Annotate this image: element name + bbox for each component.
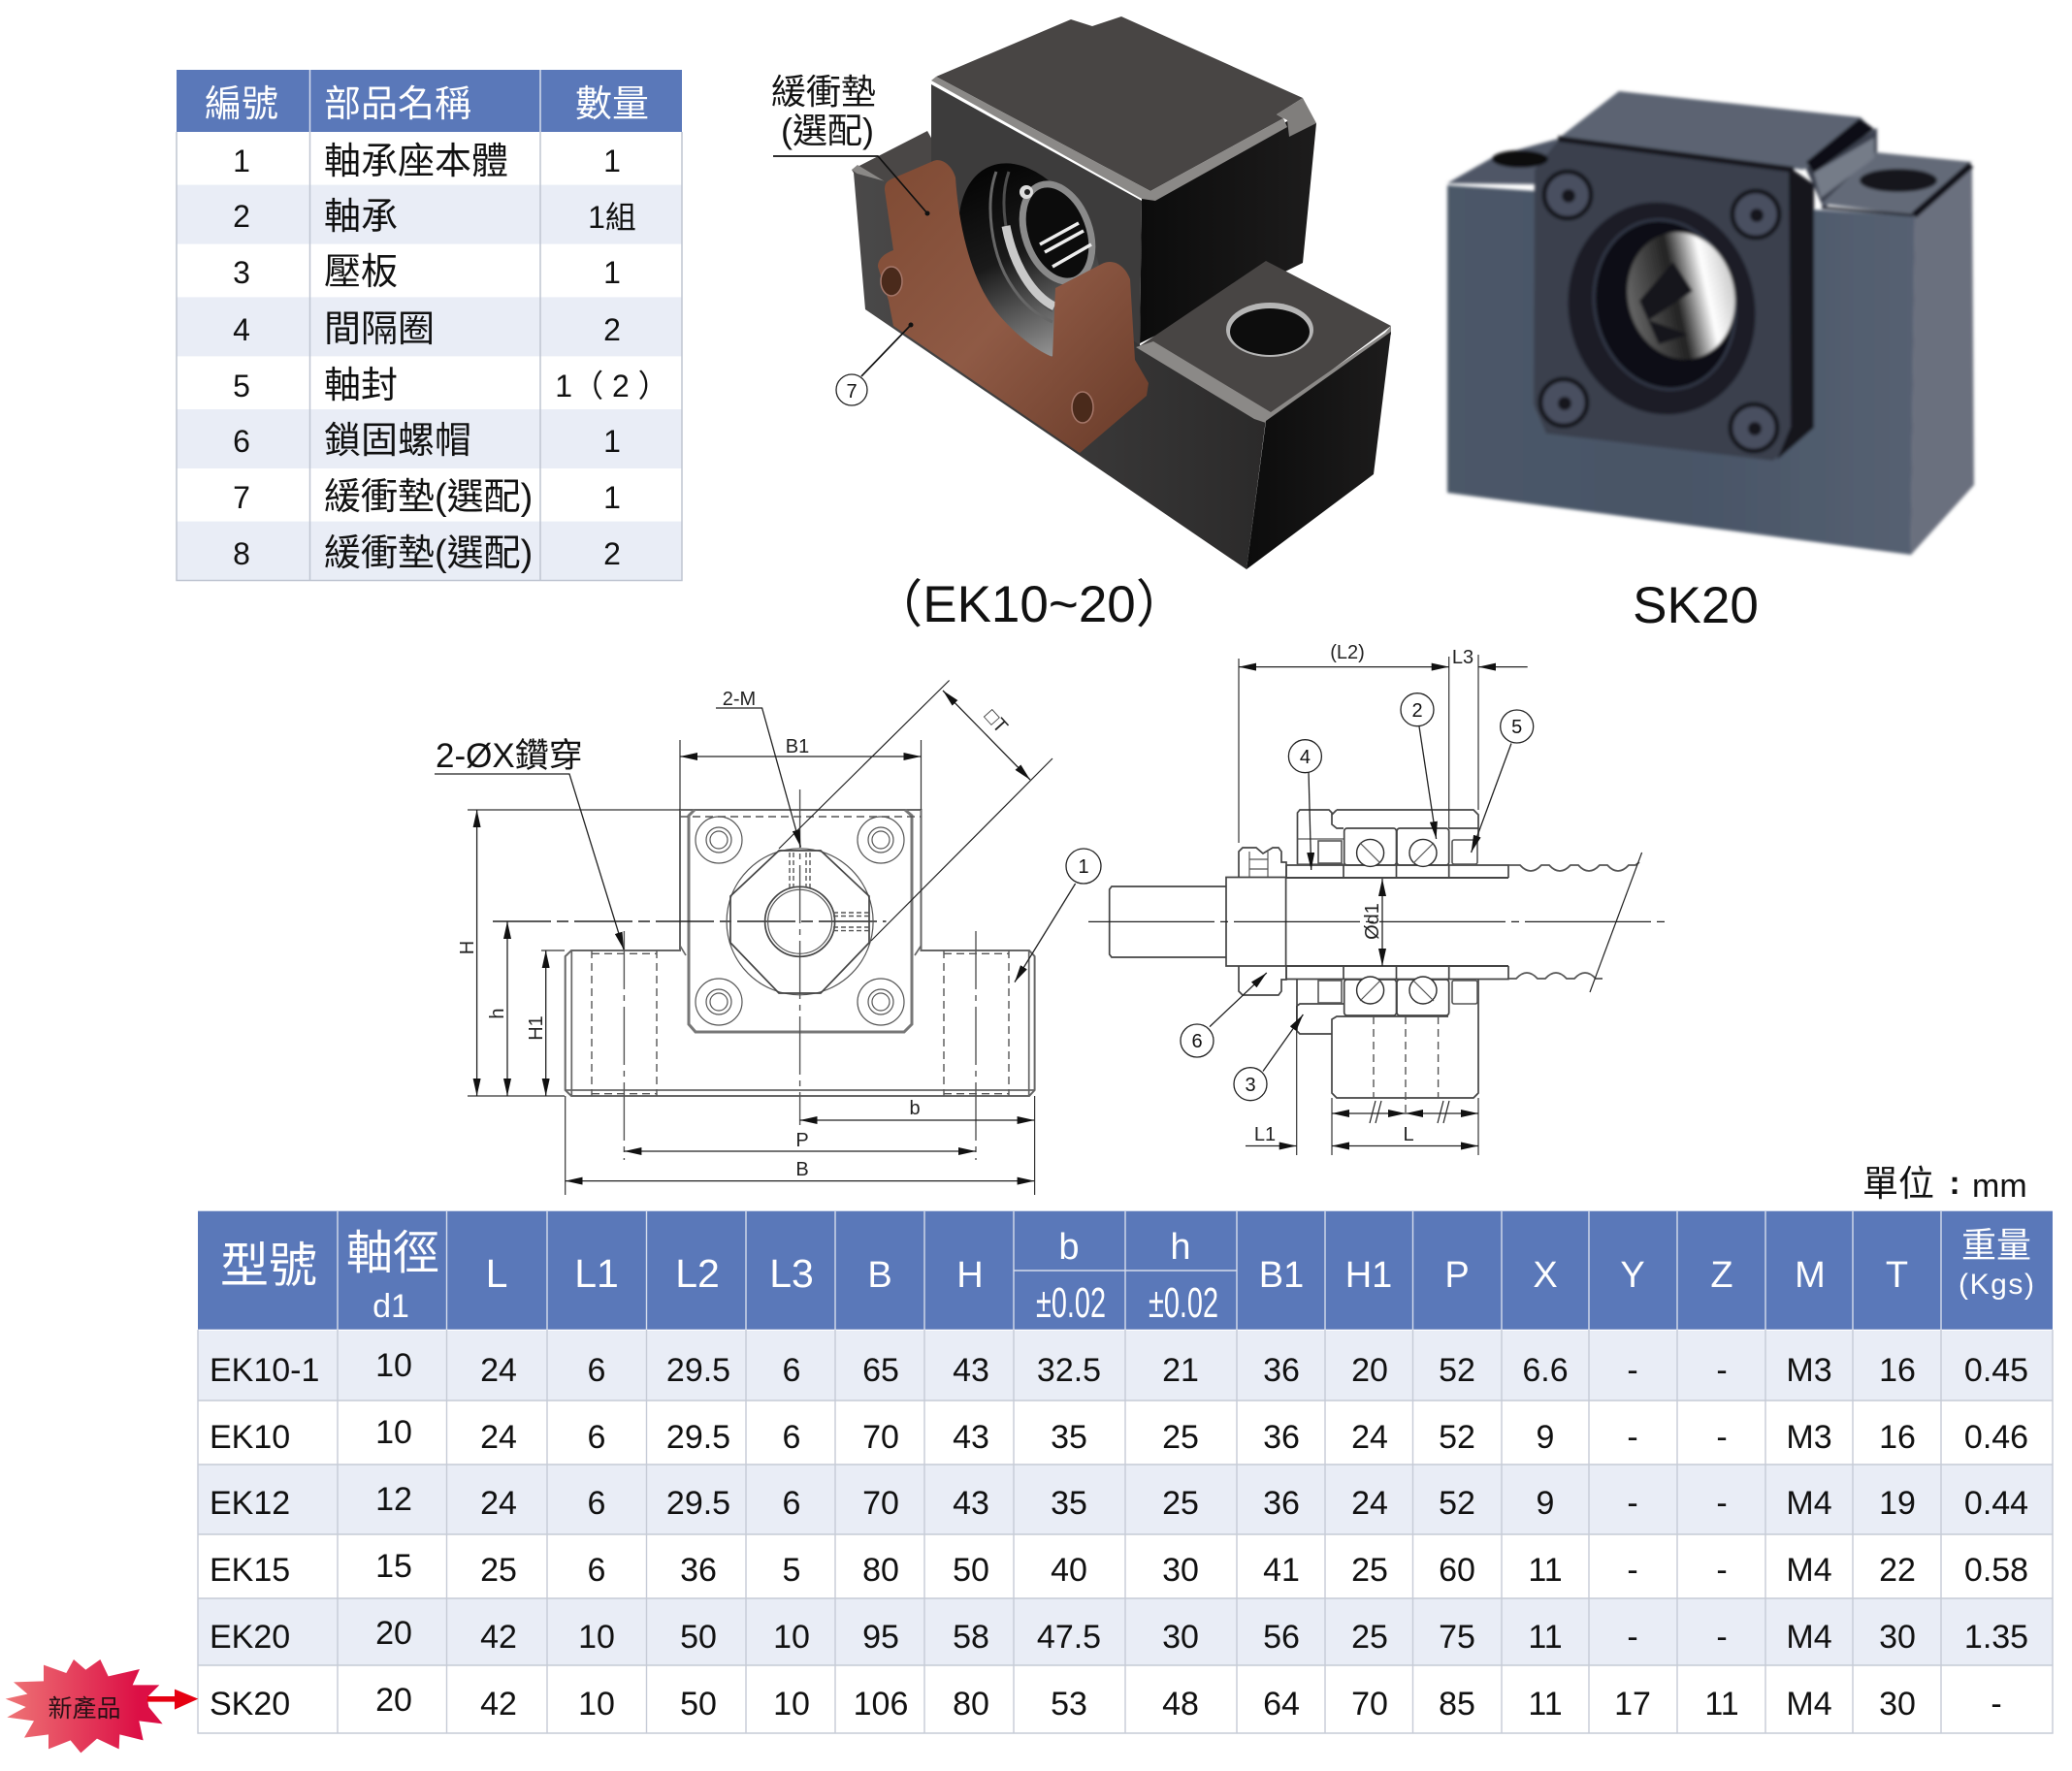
spec row EK20: 95 [862, 1619, 899, 1656]
spec row SK20: 11 [1704, 1686, 1739, 1723]
product photo: SK20 support unit [1447, 91, 1974, 555]
spec row SK20 [210, 1682, 2002, 1723]
spec row EK20: EK20 [210, 1619, 290, 1656]
callout: new product starburst: 新產品 [48, 1695, 121, 1723]
spec row EK15: M4 [1786, 1552, 1832, 1589]
callout: part 4 [1288, 740, 1321, 870]
dimension labels: H [457, 941, 478, 954]
spec row EK12: 24 [480, 1485, 517, 1522]
dimension labels: L3 [1452, 647, 1473, 668]
parts table header: 數量 [575, 84, 649, 125]
spec row EK10-1: 29.5 [666, 1352, 730, 1389]
callout: 2-ØX drilled through: 2-ØX鑽穿 [436, 737, 583, 775]
parts row 6: 1 [603, 424, 621, 459]
spec row EK10-1 [210, 1347, 2028, 1389]
spec row EK10: 43 [953, 1419, 989, 1456]
spec row EK10: 52 [1439, 1419, 1475, 1456]
parts row 3: 1 [603, 255, 621, 290]
parts row 2: 1組 [588, 200, 636, 235]
callout: part 2 [1401, 693, 1437, 839]
spec row EK20: 30 [1879, 1619, 1916, 1656]
locknut octagon and bore [727, 849, 873, 995]
spec row EK12: 36 [1263, 1485, 1300, 1522]
dimension labels: P [795, 1130, 809, 1151]
spec row EK10: 29.5 [666, 1419, 730, 1456]
parts row 6: 鎖固螺帽 [324, 421, 471, 462]
spec row EK12: M4 [1786, 1485, 1832, 1522]
spec row EK10 [210, 1414, 2028, 1456]
spec table header: L1 [574, 1251, 619, 1296]
spec row EK15: 30 [1162, 1552, 1199, 1589]
spec row EK12: 25 [1162, 1485, 1199, 1522]
spec row EK10-1: 43 [953, 1352, 989, 1389]
dimension labels [457, 689, 1012, 1180]
parts row 2: 2 [233, 199, 250, 234]
spec row EK10: 9 [1537, 1419, 1554, 1456]
spec row EK20: M4 [1786, 1619, 1832, 1656]
spec row SK20: 53 [1051, 1686, 1087, 1723]
spec row EK20 [210, 1615, 2028, 1656]
spec table header: B1 [1259, 1255, 1304, 1296]
spec row EK20: - [1716, 1619, 1728, 1656]
spec row EK20: 11 [1528, 1619, 1563, 1656]
dimension labels: □T [980, 706, 1012, 737]
bearings [1344, 828, 1449, 1015]
spec row EK15: 50 [953, 1552, 989, 1589]
parts row 8: 2 [603, 536, 621, 571]
callout: part 1 [1015, 849, 1101, 982]
spec row EK12: - [1716, 1485, 1728, 1522]
dimension labels: B1 [786, 736, 809, 757]
spec row EK10: - [1627, 1419, 1638, 1456]
spec row EK10: 24 [1351, 1419, 1388, 1456]
spec row EK10-1: M3 [1786, 1352, 1832, 1389]
parts row 2: 軸承 [324, 197, 398, 238]
drawing: cross-section view with part callouts [1088, 642, 1667, 1155]
callout: part 2: 2 [1411, 700, 1423, 722]
parts row 3: 3 [233, 255, 250, 290]
parts row 5: 1（ 2 ） [555, 369, 669, 403]
callout: part 6 [1181, 973, 1267, 1057]
parts row 4: 2 [603, 312, 621, 347]
spec table header: ±0.02 [1149, 1279, 1218, 1327]
spec row EK10-1: 10 [375, 1347, 412, 1384]
spec row SK20: 80 [953, 1686, 989, 1723]
callout: damper plate optional [771, 72, 929, 215]
dimension lines [1239, 655, 1528, 1155]
spec row SK20: 50 [680, 1686, 717, 1723]
spec row SK20: 70 [1351, 1686, 1388, 1723]
parts row 1 [233, 142, 621, 182]
panel: parts list table [177, 70, 682, 581]
dimension labels: (L2) [1330, 642, 1365, 663]
spec row EK15: 36 [680, 1552, 717, 1589]
spec row EK10: 24 [480, 1419, 517, 1456]
callout: new product starburst [6, 1659, 163, 1753]
spec row EK15: - [1627, 1552, 1638, 1589]
callout: part 1: 1 [1078, 856, 1089, 878]
unit note: mm [1972, 1168, 2027, 1205]
spec row SK20: 10 [773, 1686, 810, 1723]
panel: specification table [198, 1211, 2053, 1733]
spec row EK12: 6 [783, 1485, 800, 1522]
spec row EK20: 20 [375, 1615, 412, 1652]
dimension labels: L [1403, 1124, 1414, 1145]
parts row 2 [233, 197, 636, 238]
spec row EK12: 0.44 [1964, 1485, 2028, 1522]
spec row EK10: 10 [375, 1414, 412, 1451]
dimension lines [468, 681, 1052, 1195]
spec table header: X [1533, 1255, 1558, 1296]
dimension labels: 2-M [723, 689, 756, 710]
spec row EK20: 42 [480, 1619, 517, 1656]
spec table header: L3 [769, 1251, 814, 1296]
spec row EK20: 50 [680, 1619, 717, 1656]
dimension labels: b [909, 1098, 921, 1119]
parts table header: 部品名稱 [324, 84, 471, 125]
spec row EK10-1: 6 [783, 1352, 800, 1389]
bore [1548, 184, 1775, 433]
screw holes [696, 817, 904, 1025]
spec row EK15: 11 [1528, 1552, 1563, 1589]
spec row SK20: 106 [854, 1686, 908, 1723]
parts row 5 [233, 366, 669, 406]
spec row SK20: 30 [1879, 1686, 1916, 1723]
spec table header: L2 [675, 1251, 720, 1296]
spec row EK15: 0.58 [1964, 1552, 2028, 1589]
spec row SK20: 64 [1263, 1686, 1300, 1723]
spec table header: (Kgs) [1959, 1269, 2034, 1301]
spec row EK12: 19 [1879, 1485, 1916, 1522]
spec row EK10-1: 24 [480, 1352, 517, 1389]
parts row 8: 8 [233, 536, 250, 571]
parts row 4 [233, 309, 621, 350]
spec row EK10-1: 6.6 [1522, 1352, 1569, 1389]
spec row EK10: 6 [783, 1419, 800, 1456]
spec table header: Z [1710, 1255, 1733, 1296]
spec row SK20: 20 [375, 1682, 412, 1719]
spec row EK10: 0.46 [1964, 1419, 2028, 1456]
dimension labels: B [795, 1159, 809, 1180]
caption: SK20: SK20 [1633, 577, 1759, 634]
spec row EK10-1: 16 [1879, 1352, 1916, 1389]
spec row EK12: 24 [1351, 1485, 1388, 1522]
callout: part 5: 5 [1511, 717, 1522, 738]
spec table header: 型號 [220, 1239, 317, 1293]
spec row EK10-1: 20 [1351, 1352, 1388, 1389]
parts row 3 [233, 252, 621, 293]
spec row EK10-1: EK10-1 [210, 1352, 319, 1389]
spec row EK10-1: 21 [1162, 1352, 1199, 1389]
spec row EK12: EK12 [210, 1485, 290, 1522]
spec row EK10: 35 [1051, 1419, 1087, 1456]
spec row EK12: 52 [1439, 1485, 1475, 1522]
spec table header: 重量 [1961, 1225, 2031, 1265]
drawing: front view with dimensions [435, 681, 1101, 1195]
spec row EK15: 40 [1051, 1552, 1087, 1589]
spec row EK20: 25 [1351, 1619, 1388, 1656]
bearing bore [930, 141, 1130, 379]
parts row 7: 緩衝墊(選配) [324, 477, 533, 518]
parts table header: 編號 [205, 84, 278, 125]
spec row EK10-1: 32.5 [1037, 1352, 1101, 1389]
spec row EK12 [210, 1481, 2028, 1522]
unit note: 單位 [1862, 1164, 1934, 1204]
damper plate [878, 160, 1149, 453]
spec row EK15: 41 [1263, 1552, 1300, 1589]
parts row 5: 軸封 [324, 366, 398, 406]
parts row 4: 4 [233, 312, 250, 347]
callout: part 6: 6 [1191, 1031, 1203, 1052]
spec row EK10: 36 [1263, 1419, 1300, 1456]
callout: part 3 [1234, 1014, 1303, 1101]
parts table header [205, 84, 649, 125]
spec row EK15: 80 [862, 1552, 899, 1589]
spec row EK15: 60 [1439, 1552, 1475, 1589]
spec row EK20: 1.35 [1964, 1619, 2028, 1656]
screws [1540, 172, 1779, 451]
dimension labels: L1 [1254, 1124, 1276, 1145]
callout: part 5 [1472, 710, 1534, 853]
spec table header: ±0.02 [1036, 1279, 1106, 1327]
spec row SK20: 17 [1614, 1686, 1651, 1723]
spec row EK12: - [1627, 1485, 1638, 1522]
parts row 7 [233, 477, 621, 518]
spec row SK20: 11 [1528, 1686, 1563, 1723]
spec row EK20: 30 [1162, 1619, 1199, 1656]
dimension labels: h [487, 1008, 508, 1019]
spec table header: d1 [372, 1288, 409, 1325]
spec row EK20: - [1627, 1619, 1638, 1656]
parts row 6: 6 [233, 424, 250, 459]
spec table header: h [1170, 1227, 1191, 1268]
spec row EK15: 25 [1351, 1552, 1388, 1589]
spec row SK20: SK20 [210, 1686, 290, 1723]
spec table header: B [867, 1255, 892, 1296]
parts row 8: 緩衝墊(選配) [324, 533, 533, 574]
spec row EK20: 47.5 [1037, 1619, 1101, 1656]
arrow: new product to SK20 row [147, 1690, 198, 1710]
caption: EK10~20: （EK10~20） [871, 576, 1187, 633]
shaft and locknut [1088, 848, 1667, 995]
spec row SK20: 48 [1162, 1686, 1199, 1723]
callout: part 7: 7 [846, 381, 858, 402]
ball screw thread [1508, 853, 1642, 992]
spacer sleeves [1286, 865, 1508, 980]
dimension labels: H1 [526, 1015, 547, 1041]
spec row SK20: 10 [578, 1686, 615, 1723]
parts row 4: 間隔圈 [324, 309, 435, 350]
spec row SK20: M4 [1786, 1686, 1832, 1723]
spec row EK15: - [1716, 1552, 1728, 1589]
spec row EK15 [210, 1548, 2028, 1589]
parts row 6 [233, 421, 621, 462]
product photo: EK10~20 support unit with damper plate [771, 16, 1391, 569]
spec row EK12: 9 [1537, 1485, 1554, 1522]
parts row 1: 軸承座本體 [324, 142, 508, 182]
parts row 8 [233, 533, 621, 574]
spec row EK10-1: - [1627, 1352, 1638, 1389]
spec row EK10-1: 6 [588, 1352, 605, 1389]
spec row EK10-1: 52 [1439, 1352, 1475, 1389]
parts row 1: 1 [233, 144, 250, 178]
callout: part 4: 4 [1300, 747, 1311, 768]
spec row EK20: 75 [1439, 1619, 1475, 1656]
callout: damper plate optional: 緩衝墊 [771, 72, 876, 112]
spec row EK10: EK10 [210, 1419, 290, 1456]
parts row 3: 壓板 [324, 252, 398, 293]
spec row EK10: 16 [1879, 1419, 1916, 1456]
unit note: : [1949, 1165, 1960, 1202]
spec row EK10: 6 [588, 1419, 605, 1456]
spec row EK20: 10 [578, 1619, 615, 1656]
spec row SK20: 42 [480, 1686, 517, 1723]
spec row EK10: M3 [1786, 1419, 1832, 1456]
callout: damper plate optional: (選配) [781, 111, 874, 150]
spec row EK10: 25 [1162, 1419, 1199, 1456]
body outline [493, 789, 1035, 1160]
spec table header: Y [1620, 1255, 1645, 1296]
spec row EK10-1: 36 [1263, 1352, 1300, 1389]
unit note [1862, 1164, 2027, 1205]
spec row SK20: - [1991, 1686, 2002, 1723]
spec row EK15: 5 [783, 1552, 800, 1589]
dimension labels: Ød1 [1362, 903, 1383, 940]
parts row 5: 5 [233, 369, 250, 403]
spec row EK12: 6 [588, 1485, 605, 1522]
parts row 7: 1 [603, 480, 621, 515]
spec row EK12: 12 [375, 1481, 412, 1518]
spec row EK15: 25 [480, 1552, 517, 1589]
spec row EK15: 6 [588, 1552, 605, 1589]
spec row EK10: - [1716, 1419, 1728, 1456]
spec table grid [198, 1330, 2053, 1733]
housing and press plate [1297, 810, 1478, 1115]
spec table header: b [1058, 1227, 1080, 1268]
spec table header: H1 [1345, 1255, 1392, 1296]
spec table header: 軸徑 [346, 1228, 439, 1279]
leader: 2-M [716, 708, 801, 848]
spec table header: P [1444, 1255, 1470, 1296]
spec row EK15: 22 [1879, 1552, 1916, 1589]
spec table header: M [1795, 1255, 1826, 1296]
seals [1318, 840, 1477, 1004]
spec row EK15: EK15 [210, 1552, 290, 1589]
spec row EK12: 43 [953, 1485, 989, 1522]
spec row EK20: 58 [953, 1619, 989, 1656]
spec row EK20: 10 [773, 1619, 810, 1656]
dimension labels [1254, 642, 1473, 1145]
spec row EK15: 15 [375, 1548, 412, 1585]
parts row 7: 7 [233, 480, 250, 515]
spec table header: H [956, 1255, 984, 1296]
spec row EK10-1: - [1716, 1352, 1728, 1389]
mounting hole [1226, 303, 1313, 357]
spec row EK10-1: 0.45 [1964, 1352, 2028, 1389]
spec table header: L [486, 1251, 507, 1296]
spec row EK10-1: 65 [862, 1352, 899, 1389]
callout: 2-ØX drilled through [435, 737, 624, 950]
spec row EK12: 35 [1051, 1485, 1087, 1522]
spec table header [198, 1211, 2053, 1330]
spec row SK20: 85 [1439, 1686, 1475, 1723]
callout: part 7 [836, 322, 914, 405]
spec row EK20: 56 [1263, 1619, 1300, 1656]
callout: part 3: 3 [1245, 1075, 1256, 1096]
spec row EK10: 70 [862, 1419, 899, 1456]
parts row 1: 1 [603, 144, 621, 178]
spec row EK12: 29.5 [666, 1485, 730, 1522]
spec table header: T [1886, 1255, 1908, 1296]
spec row EK12: 70 [862, 1485, 899, 1522]
